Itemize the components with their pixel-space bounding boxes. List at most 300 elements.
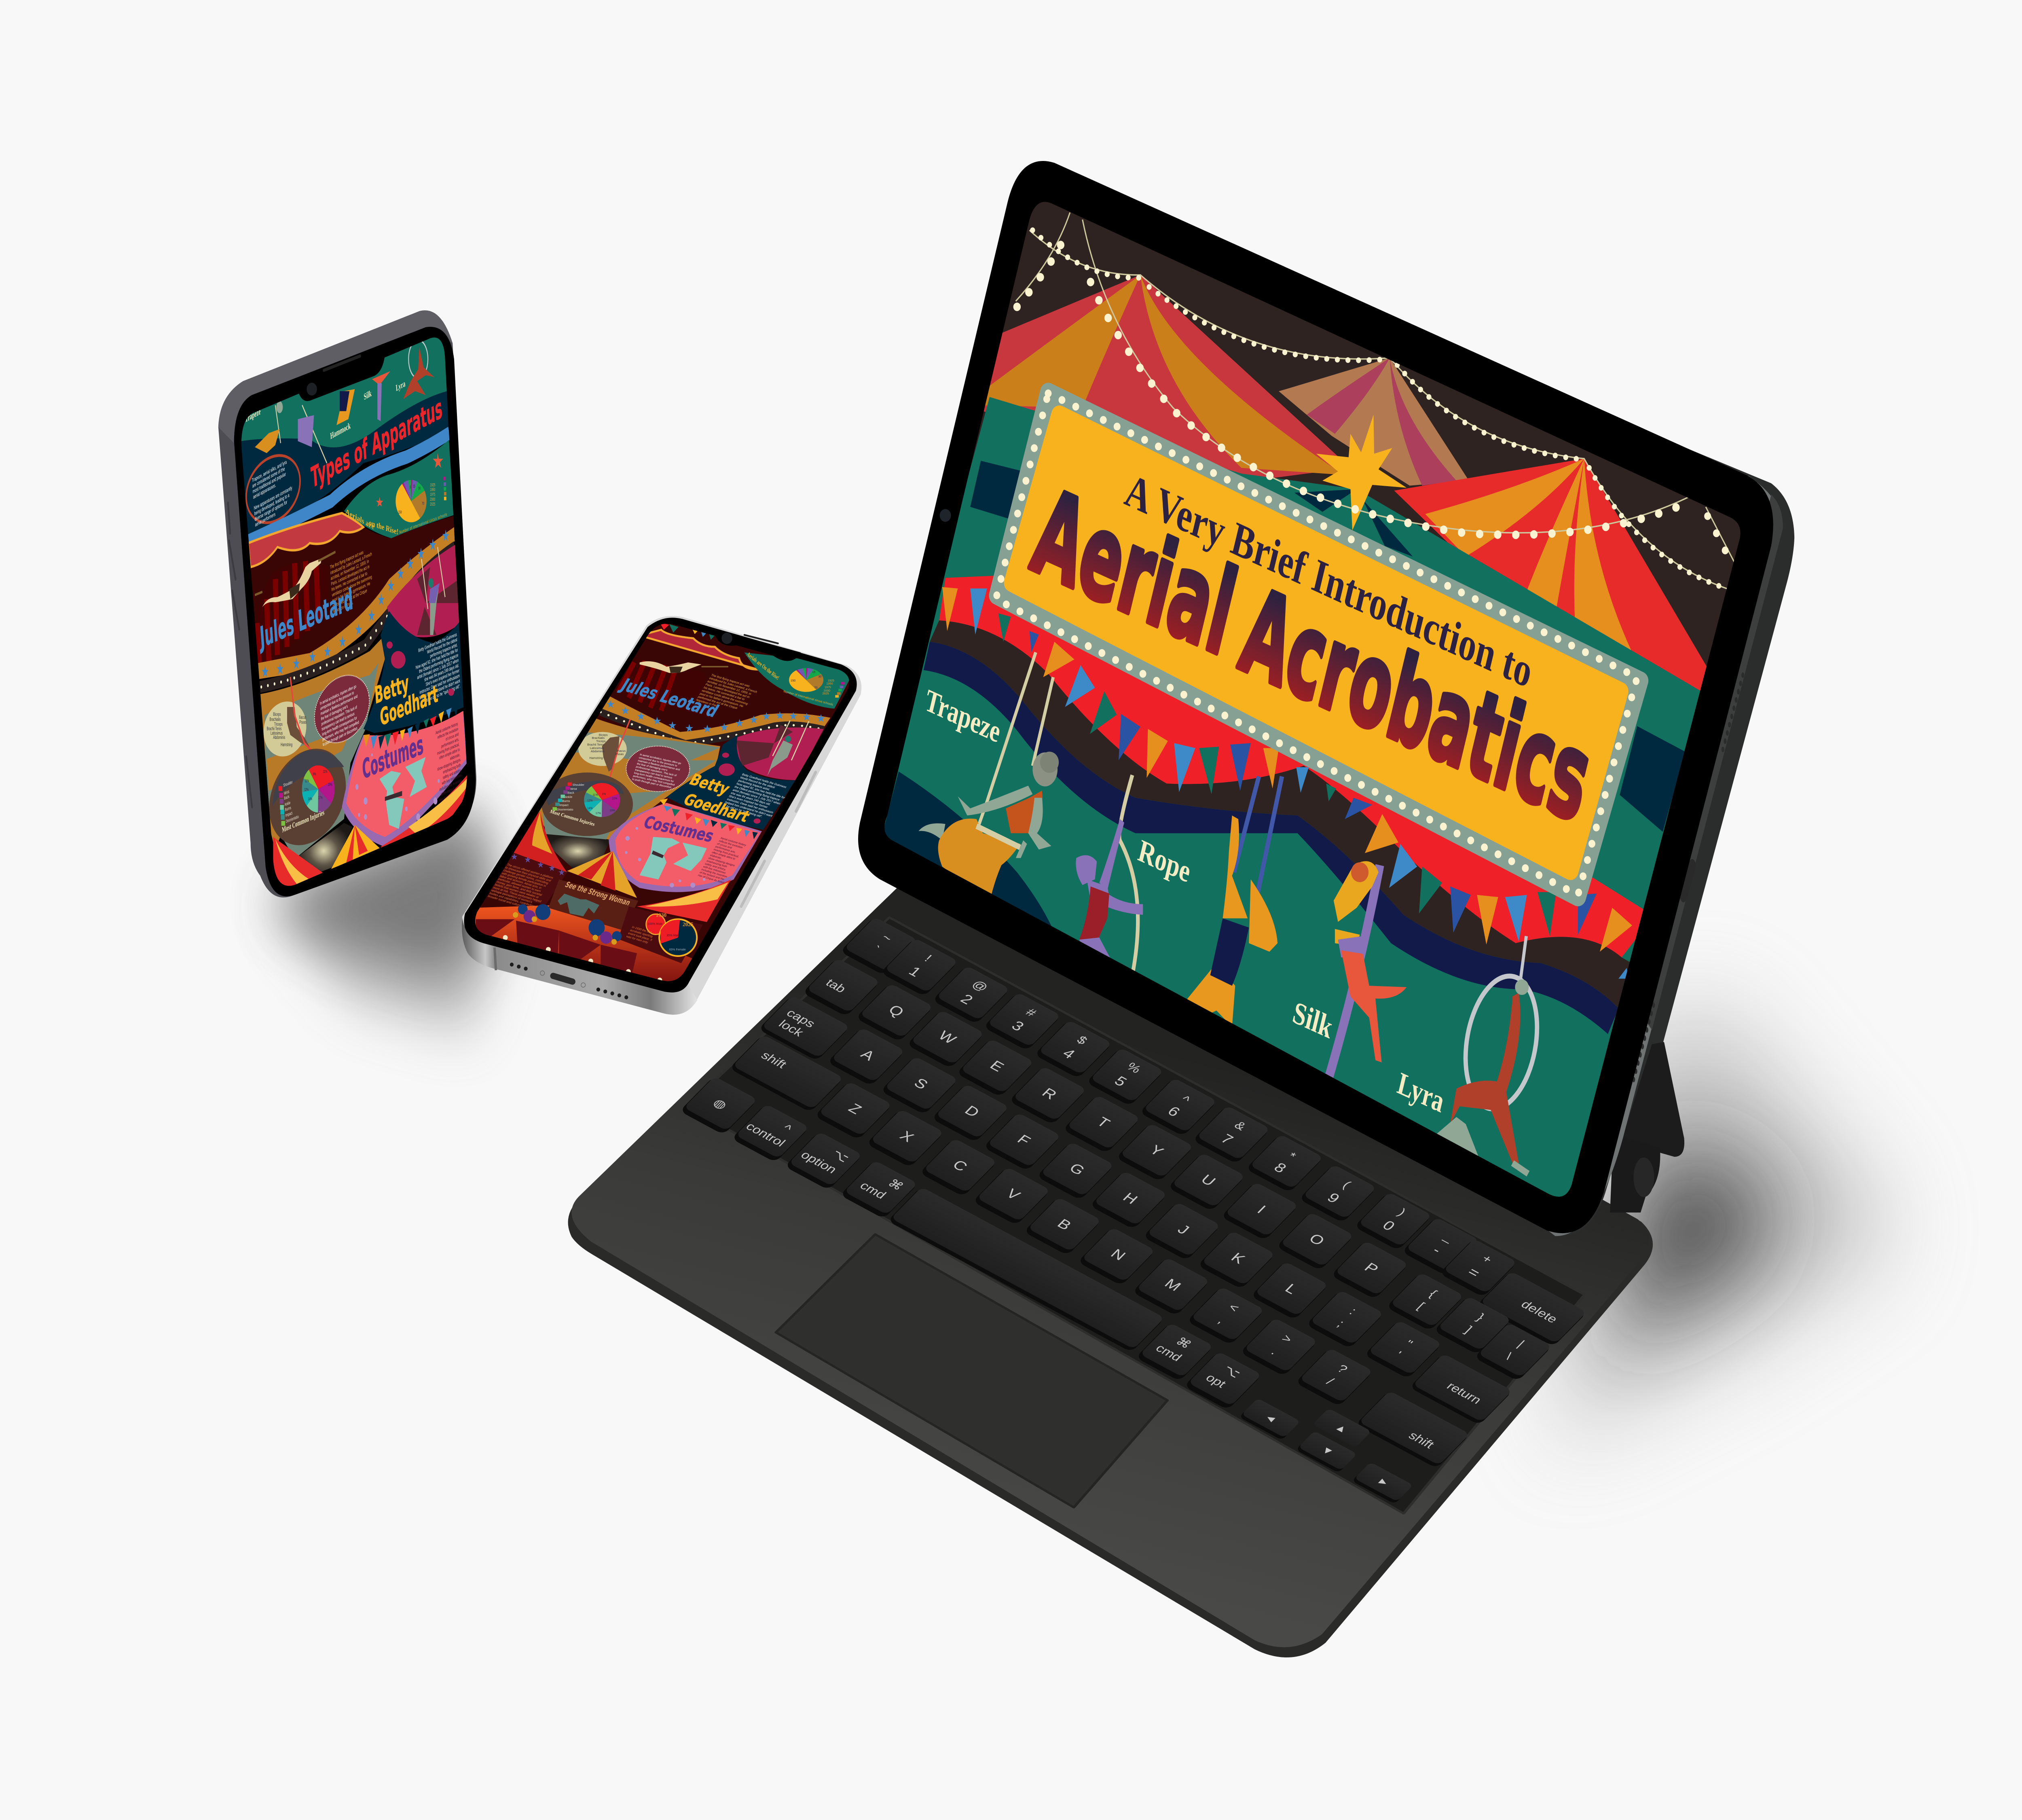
wave: navy band [924, 642, 1618, 1034]
betty paragraph: helped him understand he didn't want [724, 800, 774, 818]
stars: ★ [775, 709, 785, 722]
injuries legend [549, 783, 596, 827]
injuries ellipse: maintain a flawless performance and [320, 694, 358, 716]
betty figure [767, 721, 809, 776]
keys: E [987, 1058, 1007, 1074]
betty paragraph: instructor; Dave said her enthusiasm [726, 798, 774, 814]
keys: K [1228, 1250, 1248, 1266]
keys: Q [885, 1002, 907, 1019]
keys: ◍ [710, 1096, 730, 1111]
pie chart: circus schools: 1975 [430, 492, 435, 497]
top chamfer [218, 310, 453, 443]
case outer [1549, 442, 1794, 1236]
jules paragraph [695, 673, 760, 715]
keys: { [1426, 1287, 1440, 1299]
magenta big top [735, 728, 824, 780]
keyboard well [687, 917, 1584, 1513]
injuries ellipse: In aerial acrobatics, injuries often go [320, 684, 356, 706]
pie chart: common injuries: 19% [609, 809, 615, 812]
muscle diagram: Brachii Teres [587, 743, 604, 746]
lights strip [601, 712, 824, 744]
callout text [252, 457, 294, 528]
costumes paragraph: reflects the evolution [718, 840, 743, 849]
betty paragraph: performing trapeze artist. [430, 642, 458, 659]
stage base [452, 599, 873, 996]
costumes paragraph: often simple attire to [711, 851, 736, 861]
star [1316, 415, 1407, 530]
dark inner strip [1646, 494, 1783, 1030]
panel: gender stats: 100% Male [648, 922, 662, 926]
costumes paragraph: with key milestones [702, 866, 726, 874]
injuries ellipse [626, 746, 690, 791]
pie chart: circus schools: 15 [413, 484, 415, 489]
front camera [721, 633, 732, 644]
stars: ★ [749, 713, 758, 726]
betty paragraph: she was 84 years 249 days old. [730, 791, 772, 806]
costumes paragraph: elaborate, [709, 854, 722, 860]
costumes paragraph: with key milestones [442, 772, 462, 786]
pie chart: circus schools: Aerials are On the Rise! [746, 651, 780, 681]
betty paragraph: Betty Goedhart holds the Guinness [741, 772, 787, 789]
tablet case, stand, hinge [1549, 442, 1794, 1236]
muscle diagram: Hamstring [589, 756, 603, 760]
keys: ⌥ [829, 1147, 852, 1164]
betty paragraph: instructor; Dave said her enthusiasm [419, 673, 460, 696]
betty figure [421, 547, 445, 635]
keys: W [935, 1028, 960, 1047]
costumes paragraph: often simple attire to [439, 747, 460, 760]
pie chart: circus schools: 1925 [430, 482, 435, 487]
betty paragraph: artist (female) since 1 July 2017 when [732, 788, 781, 805]
keys: H [1120, 1190, 1141, 1207]
pie chart: common injuries [587, 791, 618, 815]
keys: control [743, 1120, 789, 1149]
panel: strong woman text: challenge gender norms, coinciding [503, 868, 549, 885]
muscle diagram: Latissimus [271, 730, 283, 736]
bezel [464, 618, 857, 993]
earpiece [324, 356, 360, 370]
keys: O [1306, 1231, 1328, 1248]
callout ring [242, 445, 304, 533]
pink costumes rim [342, 711, 467, 847]
string lights [1016, 212, 1737, 590]
keys: L [1282, 1281, 1301, 1297]
keys: C [950, 1157, 971, 1174]
callout text: aerial apparatuses. [253, 483, 276, 500]
injuries legend: Back [284, 794, 290, 801]
panel: strong woman text: broader social and cultural shifts. [487, 894, 531, 910]
sign subtitle: A Very Brief Introduction to [1121, 463, 1538, 698]
betty paragraph: Now aged 92, she has held the title for [736, 782, 786, 800]
keys: [ [1415, 1300, 1428, 1312]
panel: strong woman text: ★ [537, 860, 544, 870]
costumes paragraph: performance arts, [441, 736, 459, 749]
camera [940, 509, 951, 522]
side buttons [228, 503, 252, 807]
phone 1 screen [239, 331, 469, 889]
lights dots [601, 712, 824, 744]
stripes [615, 658, 709, 718]
keys: 0 [1379, 1218, 1398, 1234]
side buttons [741, 772, 816, 906]
stars: ★ [442, 527, 450, 545]
injuries legend: Wrist [283, 789, 290, 796]
phone 2 screen [452, 599, 873, 996]
costumes paragraph [434, 721, 463, 803]
magenta big top [387, 543, 461, 637]
keys: ; [1335, 1318, 1347, 1329]
keys: shift [1406, 1429, 1437, 1451]
panel: gender stats: 2025 [683, 921, 694, 927]
keys: ⌘ [885, 1177, 907, 1193]
title: costumes: Costumes [641, 812, 717, 846]
pinwheels [719, 753, 761, 823]
figures row [245, 340, 434, 463]
pie chart: circus schools: on the Rise! [369, 518, 399, 537]
lights strip [260, 547, 455, 687]
pinwheels [387, 641, 454, 696]
callout text: are considered some of the [252, 466, 285, 489]
injuries ellipse: professional reputation. This lack of [321, 704, 357, 726]
panel: strong woman text: particular, allowed women to earn [497, 877, 541, 893]
gold star band [258, 527, 455, 679]
keys: G [1066, 1160, 1088, 1178]
pie chart: circus schools: 5 [410, 485, 411, 489]
keys: X [897, 1128, 917, 1145]
stand [1620, 1041, 1684, 1157]
pie chart: circus schools [345, 453, 447, 537]
injuries ellipse: to push through pain or discomfort. [632, 778, 673, 789]
costumes paragraph: reflects the evolution [437, 726, 459, 740]
stars: ★ [685, 722, 694, 734]
wave: brown band [930, 620, 1647, 1008]
injuries ellipse: In aerial acrobatics, injuries often go [639, 753, 681, 765]
panel: gender stats: 1930 [656, 912, 666, 918]
right tent stripe [645, 882, 728, 907]
keys: ^ [780, 1122, 795, 1135]
injuries ellipse: the fear of damaging one's [637, 762, 668, 772]
keys: % [1124, 1060, 1144, 1075]
muscle diagram: Iliacus [299, 715, 306, 720]
stars: ★ [417, 544, 425, 563]
panel: gender stats: acrobatic sporting [629, 928, 654, 938]
title: betty goedhart [680, 770, 753, 826]
keys: D [962, 1103, 983, 1120]
muscle diagram: Brachialis [592, 736, 605, 740]
keys: caps [784, 1007, 819, 1030]
keys: * [1285, 1150, 1299, 1162]
keys: 1 [905, 964, 924, 980]
costumes paragraph [697, 837, 748, 885]
pie chart: circus schools: 1950 [430, 487, 435, 492]
keys: M [1161, 1276, 1184, 1294]
title: jules leotard: Jules Leotard [258, 582, 354, 655]
gold swoosh [266, 727, 353, 791]
teal ground [867, 397, 1746, 1220]
stars: ★ [816, 712, 825, 724]
panel: gender stats [618, 906, 703, 963]
blue ribbon [248, 433, 449, 541]
costumes paragraph: Aerial costume history [436, 721, 458, 735]
sign title: Acrobatics [1230, 562, 1603, 849]
phone 1: upright graphite phone [218, 310, 476, 897]
keys: _ [1441, 1230, 1458, 1244]
confetti dots [625, 827, 705, 888]
stars: ★ [606, 698, 615, 710]
muscle diagram: Hamstring [281, 742, 292, 748]
callout text: being developed, leading to a [254, 493, 290, 517]
pink costumes circle [615, 803, 761, 887]
teal chart panel [745, 652, 852, 709]
pie chart: circus schools: Aerials are [345, 508, 374, 531]
pie chart: circus schools: 30 [818, 675, 822, 678]
betty paragraph: She's even inspired her former [728, 794, 769, 809]
betty paragraph: performing trapeze artist. [738, 779, 771, 791]
muscle diagram: Biceps [599, 733, 608, 737]
muscle diagram: Piacus [617, 749, 626, 753]
phone body [462, 616, 861, 1015]
jules paragraph: performed the act at the Cirque [697, 695, 738, 710]
trackpad [776, 1234, 1168, 1507]
phone body [218, 310, 476, 897]
title: types of apparatus: Types of Apparatus [310, 392, 443, 495]
keys: + [1479, 1252, 1495, 1266]
pie chart: circus schools: 2025 [430, 502, 435, 506]
costumes paragraph: Aerial costume history [720, 837, 747, 847]
jules paragraph: pool in his father's gymnasium. He [699, 692, 744, 708]
panel: gender stats: In 1930 the first [631, 925, 653, 934]
panel: strong woman text: beliefs that women were weaker or [494, 883, 540, 899]
injuries legend: Ankle [284, 800, 291, 807]
panel: gender stats: was for men only. [625, 934, 649, 944]
figure: silk [1329, 861, 1407, 1078]
night sky [885, 202, 1741, 1197]
keys: V [1003, 1186, 1024, 1203]
keys: ▴ [1334, 1421, 1350, 1435]
stars: ★ [387, 576, 395, 595]
betty paragraph: She's even inspired her former [425, 668, 460, 688]
curtain scallops [640, 630, 758, 669]
keys: delete [1518, 1298, 1561, 1325]
panel: strong woman text: reshape perceptions of women's [491, 889, 533, 904]
stars: ★ [789, 710, 798, 722]
injuries disc [541, 772, 633, 836]
title: jules leotard: Jules Leotard [616, 674, 723, 721]
title: betty goedhart: Goedhart [680, 790, 753, 826]
confetti dots [355, 753, 440, 821]
jules paragraph: acrobat, on November 12, 1859, in [706, 679, 752, 696]
injuries ellipse: transparency can lead to serious [321, 711, 355, 732]
figures row: Lyra [396, 378, 406, 393]
right tent [637, 879, 731, 922]
injuries legend: Disorientatio [557, 808, 573, 811]
keys: option [798, 1149, 840, 1176]
injuries legend: Ankle [565, 795, 572, 799]
keys [679, 916, 1587, 1504]
keys: 5 [1111, 1073, 1130, 1089]
injuries legend: Shoulder [573, 783, 584, 787]
figure: hammock [1185, 777, 1282, 1027]
jules paragraph: acrobat, on November 12, 1859, in [330, 559, 369, 582]
jules paragraph: pool in his father's gymnasium. He [332, 581, 370, 604]
muscle diagram [262, 677, 312, 762]
panel: strong woman text: labor and activism. Aerial acts, in [499, 874, 542, 890]
keys: I [1254, 1202, 1269, 1216]
notch [713, 629, 801, 661]
apparatus labels [922, 682, 1447, 1120]
pie chart: circus schools: 70 [422, 501, 424, 506]
injuries legend: Impact [285, 810, 293, 818]
pie chart: circus schools: 1925 [828, 679, 834, 682]
red stripes [255, 561, 329, 663]
pie chart: circus schools: 2000 [824, 689, 830, 692]
keys: B [1054, 1216, 1075, 1233]
port [1684, 866, 1692, 895]
tent: left [983, 275, 1350, 482]
stars: ★ [261, 662, 269, 681]
magenta sectors [736, 725, 793, 766]
jules paragraph: Paris. Leotard developed the act in [331, 564, 370, 587]
keys: ⌥ [1220, 1363, 1244, 1380]
keys: 4 [1060, 1046, 1079, 1061]
injuries ellipse: transparency can lead to serious [635, 768, 673, 779]
bunting row [660, 799, 758, 839]
muscle diagram: Psoas [615, 752, 624, 756]
muscle diagram: Abdominis [273, 735, 285, 741]
speaker and port [512, 965, 629, 998]
keys: > [1279, 1332, 1295, 1346]
stars: ★ [368, 606, 375, 624]
pie chart: common injuries: 12% [304, 787, 309, 792]
injuries legend: Burns [285, 805, 292, 813]
panel: gender stats: event took place. It [627, 931, 654, 942]
pie chart: circus schools: 1975 [825, 685, 831, 689]
panel: gender stats: 35% Male [666, 933, 680, 937]
stars: ★ [292, 654, 300, 673]
bottom edge band [462, 918, 698, 1015]
keys: ) [1395, 1206, 1409, 1218]
costumes paragraph: show-stopping designs [708, 857, 736, 867]
hinge cap [1633, 1158, 1654, 1197]
injuries legend: Most Common Injuries [282, 808, 325, 834]
keys: ▾ [1320, 1444, 1336, 1457]
floor [468, 905, 694, 987]
betty paragraph: the Oldest performing flying trapeze [419, 652, 459, 675]
costumes paragraph: of circus and [716, 842, 732, 849]
injuries disc [263, 734, 352, 860]
front camera [307, 383, 317, 396]
injuries legend [279, 779, 325, 834]
keys: T [1093, 1114, 1113, 1130]
stars: ★ [653, 715, 662, 727]
figures row: Hammock [330, 420, 351, 441]
notch [297, 343, 385, 401]
pie chart: common injuries: 12% [587, 799, 592, 802]
costumes paragraph: of the leotard and the [699, 871, 725, 881]
betty paragraph: helped him understand he didn't want [419, 678, 460, 701]
keys: 7 [1218, 1131, 1237, 1147]
injuries legend: Wrist [570, 787, 577, 791]
keys: shift [758, 1049, 790, 1071]
stars: ★ [703, 722, 712, 735]
costumes paragraph: performance arts, [715, 845, 736, 854]
betty paragraph: to be old so he "quit being old". [722, 804, 764, 818]
pie chart: circus schools: 2025 [822, 692, 829, 695]
stars: ★ [397, 565, 404, 582]
tablet screen: title art [884, 202, 1741, 1197]
hinge [1610, 1135, 1660, 1213]
figure: trapeze [918, 652, 1059, 897]
keys: 9 [1324, 1190, 1343, 1206]
pie chart: common injuries: 22% [323, 769, 327, 774]
figures row: Silk [364, 388, 372, 402]
jules paragraph: performed the act at the Cirque [332, 588, 367, 609]
panel: strong woman text: more at risk. These performers helped [492, 886, 542, 903]
keys: F [1014, 1132, 1034, 1148]
betty paragraph: artist (female) since 1 July 2017 when [417, 658, 459, 681]
injuries legend: Impact [560, 803, 569, 807]
keys: = [1464, 1264, 1484, 1280]
stars: ★ [406, 554, 414, 573]
muscle diagram: Biceps [273, 712, 281, 717]
keys: ` [869, 943, 882, 955]
stars: ★ [720, 721, 729, 733]
stars: ★ [339, 633, 347, 651]
curtain scallops [248, 513, 364, 567]
callout text: most traditional and popular [253, 472, 286, 495]
bunting row [660, 623, 716, 640]
pie chart: circus schools: Number of international circus schools [399, 512, 447, 535]
title: betty goedhart: Betty [686, 770, 734, 798]
metal band [1549, 476, 1783, 1236]
stars [606, 698, 825, 735]
magenta sectors [417, 567, 460, 635]
figure: lyra [1432, 936, 1547, 1174]
injuries ellipse: to push through pain or discomfort. [323, 725, 358, 747]
keys: R [1039, 1085, 1060, 1102]
injuries ellipse: long-term health consequences for [322, 715, 357, 737]
title: betty goedhart: Goedhart [379, 680, 439, 731]
muscle diagram: Psoas [299, 720, 307, 725]
pie chart: common injuries: 14% [587, 807, 592, 810]
pie chart: common injuries: 17% [318, 796, 323, 800]
shadows on the tabletop [266, 809, 1904, 1436]
top teal wave [239, 331, 447, 447]
costumes paragraph: moving from practical, [713, 848, 740, 858]
keys: ◂ [1263, 1411, 1279, 1424]
stars [261, 527, 450, 681]
gold star band [601, 695, 830, 742]
keys: 3 [1008, 1018, 1028, 1034]
keys: & [1232, 1119, 1249, 1132]
injuries ellipse: performers, who may feel compelled [632, 775, 675, 787]
callout text: Trapeze, aerial silks, and lyra [252, 459, 287, 484]
injuries ellipse: professional reputation. This lack of [636, 766, 677, 777]
panel: strong woman text: ★ [558, 868, 565, 877]
centre tent [567, 851, 637, 898]
figures row: Trapeze [245, 406, 261, 424]
keys: \ [1502, 1350, 1516, 1362]
figure: rope [1076, 775, 1143, 975]
panel: strong woman text: to showcase their physical skills and [504, 866, 552, 882]
jules paragraph: Napoleon in Paris. [333, 600, 353, 615]
injuries ellipse: unreported due to the pressure to [320, 690, 354, 711]
jules paragraph: introduced by Jules Leotard, a French [330, 551, 372, 576]
dark red stage [248, 513, 454, 663]
keys: return [1444, 1380, 1485, 1406]
antenna line [495, 948, 496, 970]
stars: ★ [762, 710, 771, 722]
